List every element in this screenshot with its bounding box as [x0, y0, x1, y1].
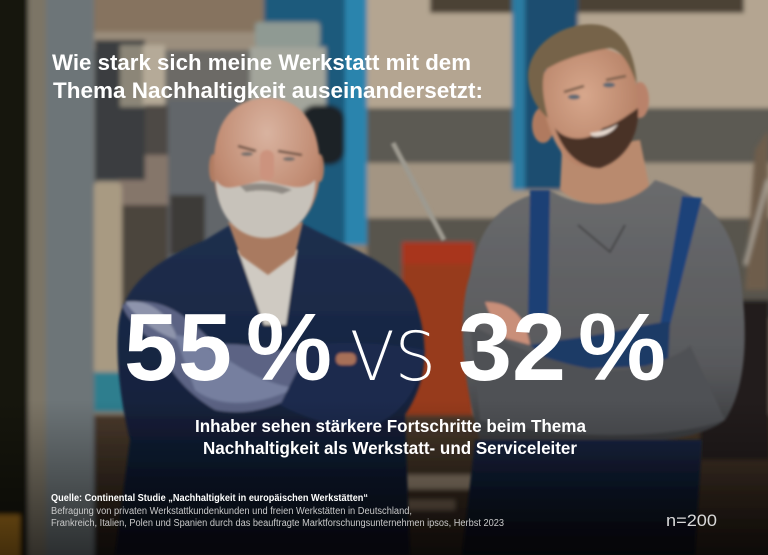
right edge tools [745, 130, 768, 290]
stat 32 %: % [578, 294, 666, 401]
source line 3: Frankreich, Italien, Polen und Spanien durch das beauftragte Marktforschungsunternehmen ipsos, Herbst 2023 [51, 518, 504, 529]
left column [0, 0, 28, 555]
bottle and bucket [93, 182, 122, 374]
man left: head [209, 98, 324, 238]
shovel handle [393, 143, 444, 240]
subheading line 2: Nachhaltigkeit als Werkstatt- und Serviceleiter [203, 438, 577, 458]
man left: neck [228, 222, 303, 275]
right wall [367, 0, 768, 112]
source note [51, 493, 504, 529]
sample size: n=200 [666, 511, 717, 530]
subheading line 1: Inhaber sehen stärkere Fortschritte beim Thema [195, 416, 586, 436]
man right: head [528, 24, 649, 168]
blue posts [264, 0, 367, 245]
bottom shade [0, 400, 768, 555]
man right: neck [560, 140, 650, 207]
red can [402, 242, 474, 432]
title line 2: Thema Nachhaltigkeit auseinandersetzt: [53, 78, 483, 103]
title [52, 50, 483, 103]
title line 1: Wie stark sich meine Werkstatt mit dem [52, 50, 471, 75]
motor [255, 22, 320, 47]
man right: sweater and overalls [462, 180, 745, 555]
subheading [195, 416, 586, 458]
man right [462, 24, 745, 555]
man left: jacket [115, 222, 425, 555]
stat 55 %: 55 [124, 294, 232, 401]
stat 32 %: 32 [458, 294, 566, 401]
floor [90, 415, 768, 555]
man left [115, 98, 425, 555]
source title: Quelle: Continental Studie „Nachhaltigkeit in europäischen Werkstätten“ [51, 493, 368, 504]
vs: VS [350, 318, 436, 397]
source line 2: Befragung von privaten Werkstattkundenkunden und freien Werkstätten in Deutschland, [51, 506, 412, 517]
stat 55 %: % [246, 294, 332, 401]
